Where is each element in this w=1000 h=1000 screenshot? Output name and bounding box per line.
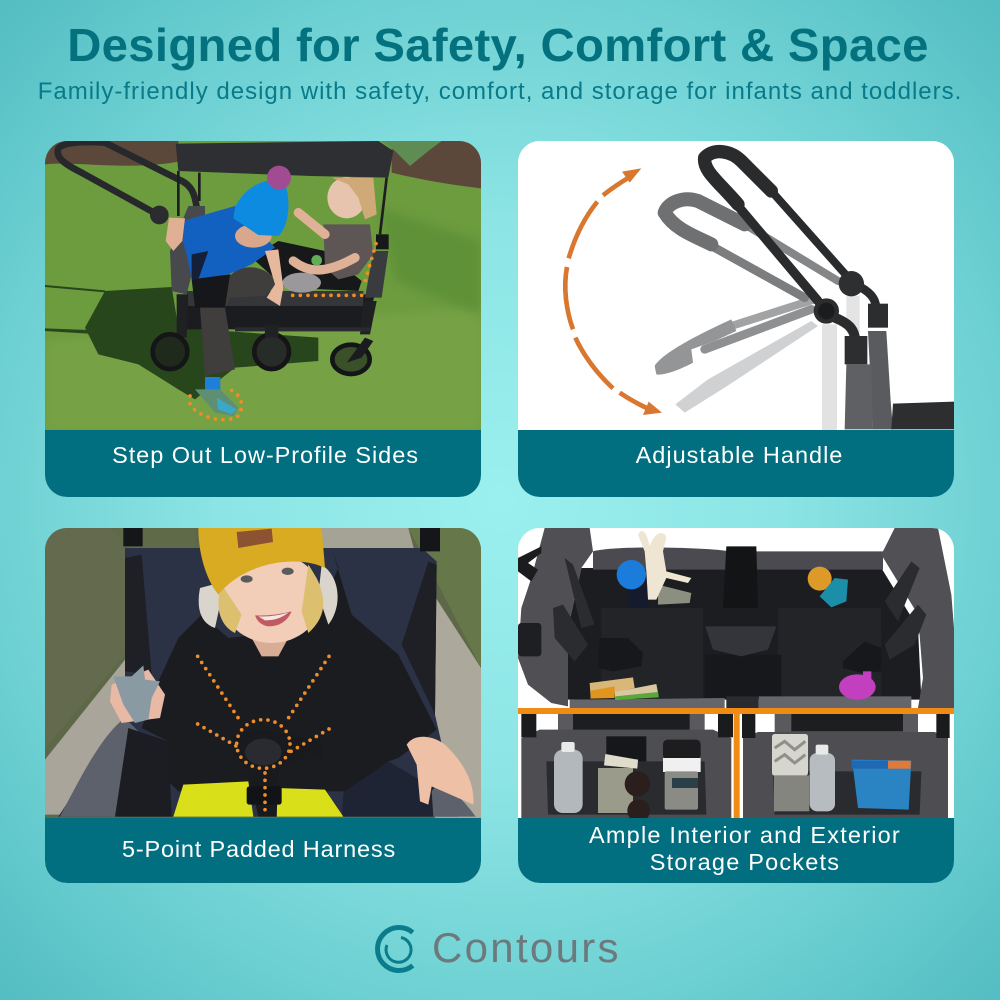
panel: storage pockets (518, 528, 954, 883)
caption (518, 430, 954, 497)
caption: Step Out Low-Profile Sides (112, 442, 419, 468)
logo: Contours (375, 924, 621, 973)
dotted highlights (190, 244, 376, 420)
child in blue (166, 166, 291, 416)
icon: C rings (375, 925, 414, 973)
seat (58, 528, 476, 817)
exterior view left (521, 714, 733, 822)
harness (198, 656, 329, 817)
title: Designed for Safety, Comfort & Space (67, 19, 929, 71)
panel: adjustable handle (518, 141, 954, 497)
caption: Adjustable Handle (636, 442, 843, 468)
subtitle: Family-friendly design with safety, comfort, and storage for infants and toddlers. (38, 78, 962, 105)
interior view (518, 528, 954, 708)
orange dividers (518, 708, 954, 818)
orange arrow (565, 168, 662, 415)
caption (45, 430, 481, 497)
wagon side (845, 304, 954, 429)
caption: Storage Pockets (650, 848, 840, 874)
child (110, 528, 474, 817)
wordmark: Contours (432, 924, 621, 971)
photo: children in wagon on grass (45, 141, 481, 430)
caption (518, 818, 954, 883)
photos: wagon interior and exterior (518, 528, 954, 818)
mid faded handle (665, 199, 838, 298)
caption: Ample Interior and Exterior (589, 822, 901, 848)
dark upright handle (705, 152, 876, 341)
illustration: handle positions (518, 141, 954, 430)
wagon (58, 141, 393, 374)
panel: step out low-profile sides (45, 141, 481, 497)
caption (45, 818, 481, 883)
caption: 5-Point Padded Harness (122, 836, 396, 862)
lowest faded handle (675, 321, 818, 413)
low faded handle (655, 299, 815, 375)
exterior view right (742, 714, 950, 818)
panel: 5-point padded harness (45, 528, 481, 883)
photo: smiling toddler in harness (45, 528, 481, 818)
child in grey (252, 177, 377, 293)
